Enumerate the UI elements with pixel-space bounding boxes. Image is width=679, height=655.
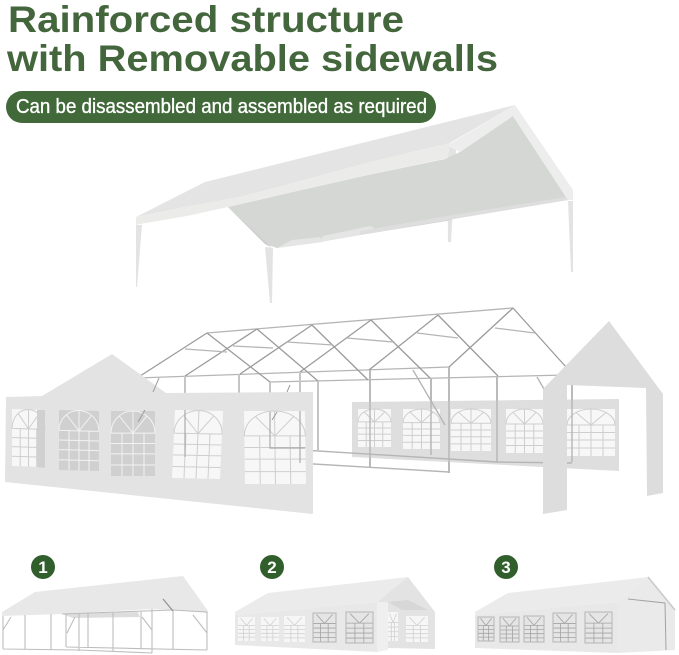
step 1 badge	[31, 555, 55, 579]
step 1	[2, 555, 208, 653]
gable end panel	[543, 321, 663, 514]
step 2 tent with sidewalls	[235, 577, 435, 652]
step 3 badge: 3	[501, 558, 511, 577]
title	[6, 0, 498, 79]
frame ridge and eaves	[137, 308, 566, 382]
step 2	[235, 555, 435, 652]
frame purlins	[185, 328, 535, 352]
step 3	[475, 555, 675, 653]
step 1 badge: 1	[38, 558, 48, 577]
title: with Removable sidewalls	[6, 38, 498, 79]
step 3 enclosed tent	[475, 577, 675, 653]
title: Rainforced structure	[8, 0, 404, 40]
subtitle pill	[6, 91, 436, 123]
canopy illustration	[136, 105, 573, 303]
frame foreground over back wall	[270, 367, 572, 473]
step 1 tent: roof and frame	[2, 576, 208, 653]
subtitle pill: Can be disassembled and assembled as required	[16, 96, 427, 118]
frame posts and ground rails	[185, 367, 572, 473]
left sidewall with gable	[5, 354, 313, 514]
frame rafters	[137, 308, 566, 382]
steel frame	[137, 308, 572, 473]
back sidewall	[352, 399, 619, 471]
step 2 badge: 2	[267, 558, 277, 577]
step 2 badge	[260, 555, 284, 579]
step 3 badge	[494, 555, 518, 579]
